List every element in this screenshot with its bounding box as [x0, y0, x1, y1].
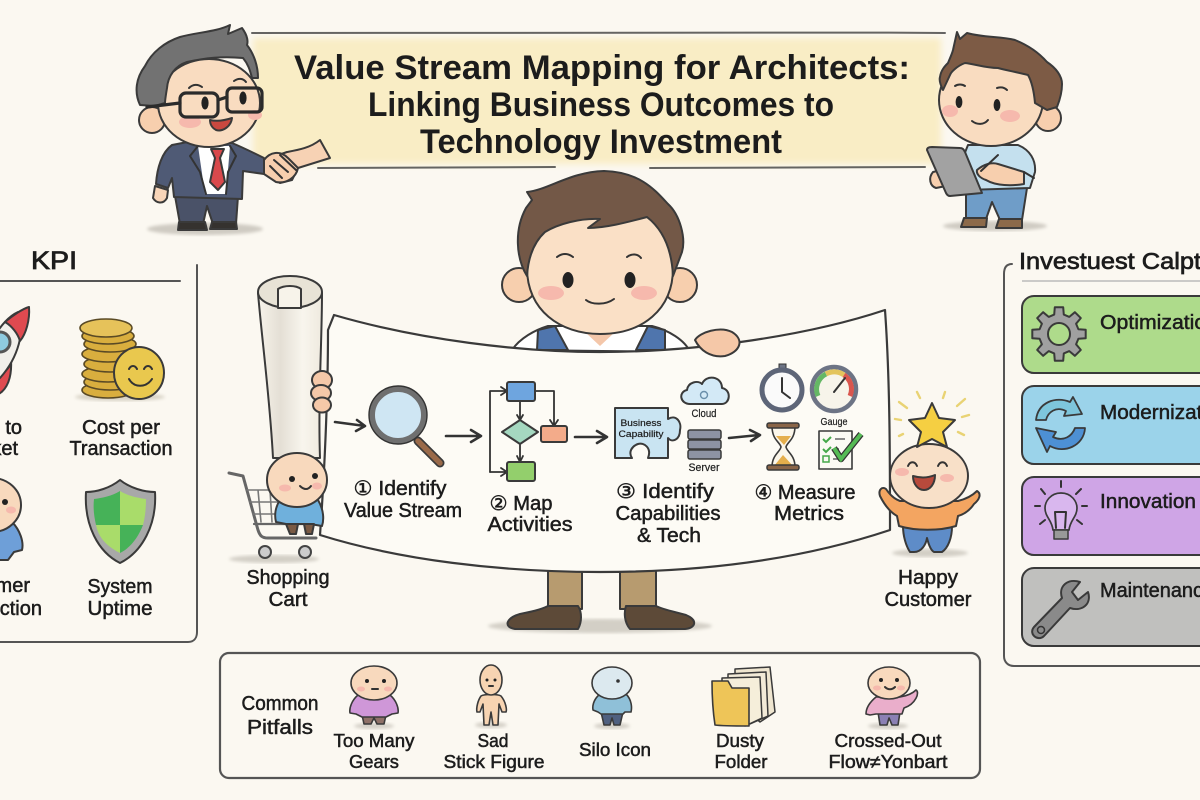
step 4 label: Metrics — [774, 503, 844, 525]
label: time to market — [0, 417, 22, 460]
icon: flowchart — [490, 382, 567, 481]
figure: silo icon — [579, 667, 651, 760]
paper scroll banner — [258, 276, 890, 572]
heading: common pitfalls — [242, 693, 318, 739]
icon: dusty folder: Folder — [714, 752, 768, 772]
face — [527, 205, 673, 334]
heading: investment panel: Investuest Calpt — [1019, 248, 1200, 274]
label: happy customer: Happy — [898, 567, 958, 589]
figure: sad stick figure: Sad — [478, 731, 508, 751]
icon: refresh arrows — [1036, 397, 1085, 452]
panel: KPI — [0, 247, 197, 642]
icon: shield — [86, 480, 155, 563]
step 3 label: & Tech — [637, 525, 701, 547]
icon: gauge — [812, 367, 856, 428]
icon: magnifier — [369, 386, 440, 463]
figure: sad stick figure: Stick Figure — [444, 752, 544, 772]
character: central architect holding scroll — [488, 171, 712, 633]
icon: gauge: Gauge — [820, 416, 848, 428]
step 2 label: ② Map — [490, 493, 552, 515]
icon: gear — [1032, 307, 1086, 361]
heading: common pitfalls: Pitfalls — [247, 717, 313, 739]
character: colleague with tablet — [927, 32, 1062, 231]
label: shopping cart: Shopping — [246, 567, 330, 589]
arrow: into step one — [335, 420, 365, 431]
step 3 label: ③ Identify — [616, 481, 714, 503]
character: shopping cart — [229, 453, 327, 563]
arrow: step one to two — [446, 430, 481, 442]
arrow: step two to three — [575, 431, 607, 443]
icon: checklist — [819, 431, 861, 469]
glasses — [147, 88, 262, 117]
step 4 label: ④ Measure — [754, 482, 856, 504]
step 3 label: Capabilities — [616, 503, 720, 525]
handshake hand — [264, 153, 298, 182]
figure: too many gears — [334, 666, 414, 772]
character: manager shaking hands — [137, 25, 330, 235]
title text — [294, 49, 910, 161]
step 4 label — [754, 482, 856, 525]
label: happy customer — [884, 567, 972, 611]
icon: dusty folder: Dusty — [716, 731, 764, 751]
row: innovation — [1022, 477, 1200, 555]
icon: dusty folder — [712, 667, 775, 772]
title text: Linking Business Outcomes to — [368, 86, 834, 124]
icon: server — [688, 430, 721, 474]
figure: crossed-out flowchart: Crossed-Out — [834, 731, 942, 751]
icon: wrench — [1032, 581, 1089, 638]
hair — [518, 171, 683, 276]
icon: coin stack — [75, 319, 165, 401]
icon: cloud: Cloud — [692, 408, 716, 420]
step 1 label: Value Stream — [344, 500, 462, 522]
icon: stopwatch — [762, 364, 802, 410]
torso — [512, 326, 690, 352]
label: cost per transaction — [70, 417, 172, 460]
figure: crossed-out flowchart: Flow≠Yonbart — [828, 752, 948, 772]
step 1 label: ① Identify — [354, 478, 446, 500]
label: system uptime: System — [88, 576, 152, 598]
left hand — [311, 371, 332, 412]
icon: hourglass — [767, 423, 799, 470]
jacket — [156, 140, 264, 199]
row: modernization — [1022, 386, 1200, 464]
icon: business capability puzzle piece: Capability — [618, 429, 664, 440]
head — [139, 107, 165, 133]
label: innovation: Innovation — [1100, 491, 1196, 513]
panel: investment categories — [1004, 248, 1200, 666]
step 2 label: Activities — [488, 514, 572, 536]
figure: crossed-out flowchart — [828, 667, 948, 772]
legs — [508, 565, 694, 629]
label: shopping cart: Cart — [268, 589, 308, 611]
row: optimization — [1022, 296, 1200, 373]
label: system uptime: Uptime — [88, 598, 152, 620]
title banner — [252, 32, 945, 168]
icon: cloud — [681, 378, 729, 420]
heading: KPI: KPI — [31, 247, 77, 275]
figure: sad stick figure — [444, 665, 544, 772]
icon: business capability puzzle piece — [615, 408, 680, 458]
handshake forearm — [268, 140, 330, 183]
icon: server: Server — [688, 462, 720, 474]
character: happy customer with star — [879, 392, 980, 557]
label: cost per transaction: Cost per — [82, 417, 160, 439]
ears — [502, 268, 536, 302]
figure: too many gears: Too Many — [334, 731, 414, 751]
icon: gold star — [909, 403, 955, 447]
row: maintenance — [1022, 568, 1200, 646]
right hand — [695, 330, 739, 356]
label: customer satisfaction — [0, 575, 42, 620]
title text: Value Stream Mapping for Architects: — [294, 49, 910, 87]
head — [1035, 105, 1061, 131]
step 3 label — [616, 481, 720, 547]
icon: business capability puzzle piece: Business — [620, 418, 662, 429]
panel: common pitfalls — [220, 653, 980, 778]
banner sheet — [320, 310, 890, 572]
label: happy customer: Customer — [884, 589, 972, 611]
heading: common pitfalls: Common — [242, 693, 318, 715]
scroll roll — [258, 276, 322, 458]
label: system uptime — [88, 576, 152, 620]
icon: customer figure — [0, 478, 23, 560]
icon: light bulb — [1035, 481, 1087, 539]
icon: rocket — [0, 307, 29, 396]
step 2 label — [488, 493, 572, 536]
step 1 label — [344, 478, 462, 522]
label: cost per transaction: Transaction — [70, 438, 172, 460]
label: shopping cart — [246, 567, 330, 611]
figure: too many gears: Gears — [349, 752, 399, 772]
figure: silo icon: Silo Icon — [579, 740, 651, 760]
arrow: step three to four — [729, 430, 760, 441]
title text: Technology Investment — [420, 123, 782, 161]
